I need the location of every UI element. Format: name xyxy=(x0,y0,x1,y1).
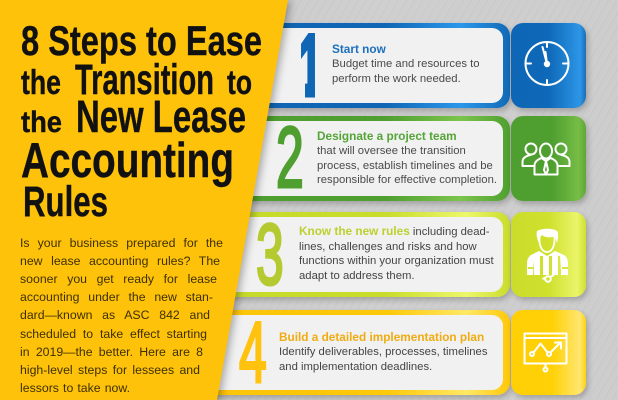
step 1 body: Budget time and resources to xyxy=(332,58,480,70)
icon tile 3: person xyxy=(511,212,586,297)
step 2 heading: Designate a project team xyxy=(317,129,457,143)
step 1 heading: Start now xyxy=(332,42,386,56)
step 3 text: Know the new rules including dead- xyxy=(299,224,490,238)
title: Rules xyxy=(23,178,108,226)
step 2 text xyxy=(317,129,497,186)
step 4 heading: Build a detailed implementation plan xyxy=(279,330,484,344)
step 3 text: functions within your organization must xyxy=(299,255,494,267)
card 2: project team xyxy=(200,116,510,201)
title: 8 Steps to Ease xyxy=(21,17,262,64)
intro paragraph: sooner you get ready for lease xyxy=(20,272,217,286)
numeral 2: 2 xyxy=(276,109,304,205)
numeral 3: 3 xyxy=(256,206,284,302)
step 2 body: process, establish timelines and be xyxy=(317,160,493,172)
intro paragraph: new lease accounting rules? The xyxy=(20,254,220,268)
icon tile 1: clock xyxy=(511,23,586,108)
title: to xyxy=(227,64,252,102)
step 1 body xyxy=(332,58,480,85)
title: Transition xyxy=(75,56,214,104)
step 4 body: and implementation deadlines. xyxy=(279,361,432,373)
intro paragraph xyxy=(20,236,223,395)
numeral 1: 1 xyxy=(300,19,321,114)
intro paragraph: dard—known as ASC 842 and xyxy=(20,308,210,322)
icon tile 2: team xyxy=(511,116,586,201)
title: the xyxy=(21,106,62,139)
icon tile 4: presentation chart xyxy=(511,310,586,395)
step 4 body xyxy=(279,346,488,373)
step 2 body: responsible for effective completion. xyxy=(317,174,497,186)
intro paragraph: lessors to take now. xyxy=(20,381,130,395)
step 3 text: adapt to address them. xyxy=(299,270,415,282)
title: New Lease xyxy=(76,91,246,142)
intro paragraph: high-level steps for lessees and xyxy=(20,363,200,377)
step 3 text: lines, challenges and risks and how xyxy=(299,241,477,253)
step 1 text xyxy=(332,42,480,85)
title: the xyxy=(21,64,61,102)
intro paragraph: Is your business prepared for the xyxy=(20,236,223,250)
intro paragraph: accounting under the new stan- xyxy=(20,290,213,304)
step 4 body: Identify deliverables, processes, timelines xyxy=(279,346,487,358)
intro paragraph: in 2019—the better. Here are 8 xyxy=(20,345,203,359)
numeral 1 xyxy=(290,19,325,114)
numeral 4: 4 xyxy=(239,304,267,400)
step 3 text xyxy=(299,224,494,282)
title: Accounting xyxy=(21,134,234,188)
card 3: know the new rules xyxy=(200,212,510,297)
card 4: implementation plan xyxy=(200,310,510,395)
card 1: start now xyxy=(200,23,510,108)
step 4 text xyxy=(279,330,488,373)
step 1 body: perform the work needed. xyxy=(332,73,461,85)
step 2 body: that will oversee the transition xyxy=(317,145,466,157)
step 2 body xyxy=(317,145,497,186)
intro paragraph: scheduled to take effect starting xyxy=(20,327,207,341)
